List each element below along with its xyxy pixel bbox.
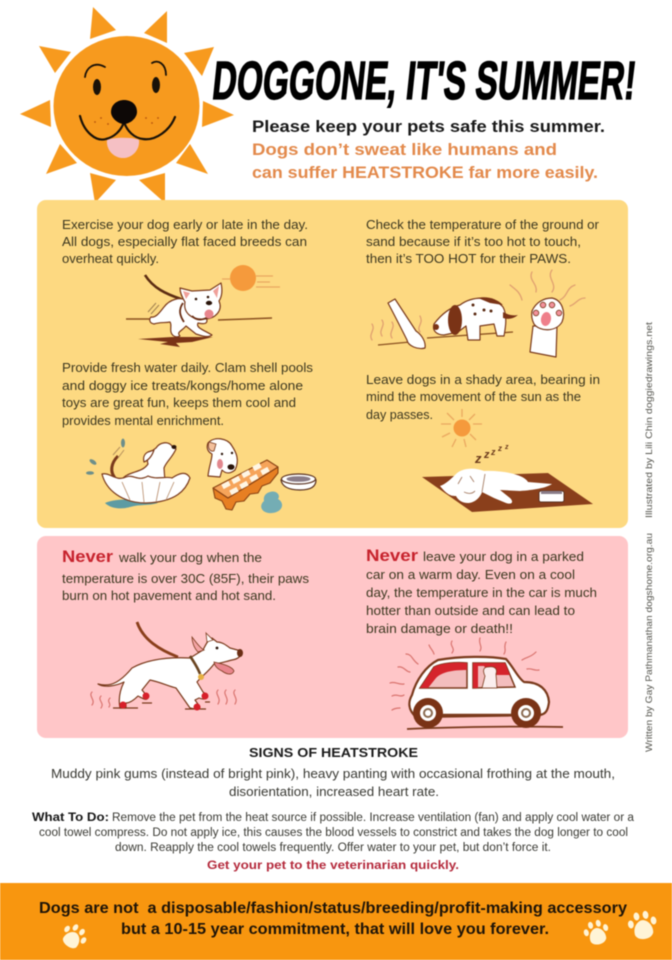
label: zzz: z (483, 449, 490, 461)
label: zzz: z (474, 451, 482, 466)
tip: ground temperature text (366, 217, 600, 266)
tip: fresh water text: toys are great fun, keeps them cool and (62, 395, 296, 410)
tip: fresh water text (62, 360, 314, 428)
subtitle (252, 117, 605, 182)
illustration: running bulldog with sun (126, 265, 280, 347)
tip: shady area text: day passes. (366, 407, 433, 422)
warning: parked car text: Never (366, 546, 418, 565)
heading: signs of heatstroke: SIGNS OF HEATSTROKE (249, 745, 418, 760)
tip: fresh water text: and doggy ice treats/kongs/home alone (62, 378, 303, 393)
footer message: Dogs are not a disposable/fashion/status/breeding/profit-making accessory (39, 900, 627, 917)
text: signs description: disorientation, increased heart rate. (229, 784, 439, 799)
text: signs description (51, 766, 615, 799)
tip: shady area text: Leave dogs in a shady area, bearing in (366, 372, 600, 387)
illustration: dog in clam shell pool, ice tray, bowl and kong (86, 438, 316, 513)
footer banner (0, 883, 672, 960)
warning: parked car text: leave your dog in a parked (423, 549, 584, 564)
tip: exercise text: overheat quickly. (62, 251, 159, 266)
warning: parked car text: car on a warm day. Even on a cool (366, 567, 575, 582)
panel: yellow care tips (37, 200, 628, 528)
subtitle: Please keep your pets safe this summer. (252, 117, 605, 136)
credit: illustrator: Illustrated by Lili Chin doggiedrawings.net (644, 322, 655, 518)
warning: parked car text: hotter than outside and can lead to (366, 603, 575, 618)
warning: hot pavement text: temperature is over 30C (85F), their paws (62, 571, 309, 586)
warning: parked car text: brain damage or death!! (366, 621, 513, 636)
text: what to do: What To Do: (32, 812, 109, 824)
warning: parked car text: day, the temperature in the car is much (366, 585, 597, 600)
warning: hot pavement text: Never (62, 547, 113, 566)
label: zzz: z (504, 444, 509, 451)
icon: paw far right (626, 909, 659, 941)
tip: fresh water text: Provide fresh water daily. Clam shell pools (62, 360, 314, 375)
text: signs description: Muddy pink gums (instead of bright pink), heavy panting with occasional frothing at the mouth, (51, 766, 615, 781)
text: what to do (32, 812, 635, 872)
illustration: hand testing ground, spotted dog and hot paw (371, 270, 585, 357)
warning: hot pavement text: burn on hot pavement and hot sand. (62, 588, 276, 603)
panel: pink warnings (37, 536, 628, 738)
tip: fresh water text: provides mental enrichment. (62, 413, 224, 428)
text: what to do: down. Reapply the cool towels frequently. Offer water to your pet, but don’t force it. (115, 842, 551, 854)
tip: ground temperature text: Check the temperature of the ground or (366, 217, 600, 232)
tip: ground temperature text: sand because if it’s too hot to touch, (366, 234, 581, 249)
text: what to do: cool towel compress. Do not apply ice, this causes the blood vessels to constrict and takes the dog longer to cool (39, 827, 628, 839)
label: zzz: z (497, 444, 502, 453)
tip: shady area text (366, 372, 600, 422)
subtitle: can suffer HEATSTROKE far more easily. (252, 163, 598, 182)
illustration: walking dog with burning paws (91, 622, 243, 710)
label: zzz (474, 444, 509, 466)
illustration: dog sleeping on blanket under sun (422, 409, 593, 512)
tip: ground temperature text: then it’s TOO HOT for their PAWS. (366, 251, 571, 266)
footer message: but a 10-15 year commitment, that will love you forever. (121, 921, 549, 938)
footer message (39, 900, 627, 938)
subtitle: Dogs don’t sweat like humans and (252, 140, 557, 159)
icon: paw left (57, 920, 91, 953)
tip: exercise text (62, 217, 308, 266)
warning: hot pavement text: walk your dog when the (118, 550, 262, 565)
text: what to do: Remove the pet from the heat source if possible. Increase ventilation (fan) and apply cool water or a (112, 812, 635, 824)
illustration: hot car with dog inside (390, 638, 563, 729)
warning: hot pavement text (62, 547, 309, 603)
text: what to do: Get your pet to the veterinarian quickly. (207, 860, 459, 872)
tip: exercise text: Exercise your dog early or late in the day. (62, 217, 308, 232)
credit: writer: Written by Gay Pathmanathan dogshome.org.au (644, 533, 655, 752)
icon: smiling sun dog (20, 7, 234, 203)
warning: parked car text (366, 546, 597, 636)
icon: paw right (581, 918, 612, 947)
label: zzz: z (490, 447, 496, 457)
tip: exercise text: All dogs, especially flat faced breeds can (62, 234, 307, 249)
tip: shady area text: mind the movement of the sun as the (366, 389, 581, 404)
